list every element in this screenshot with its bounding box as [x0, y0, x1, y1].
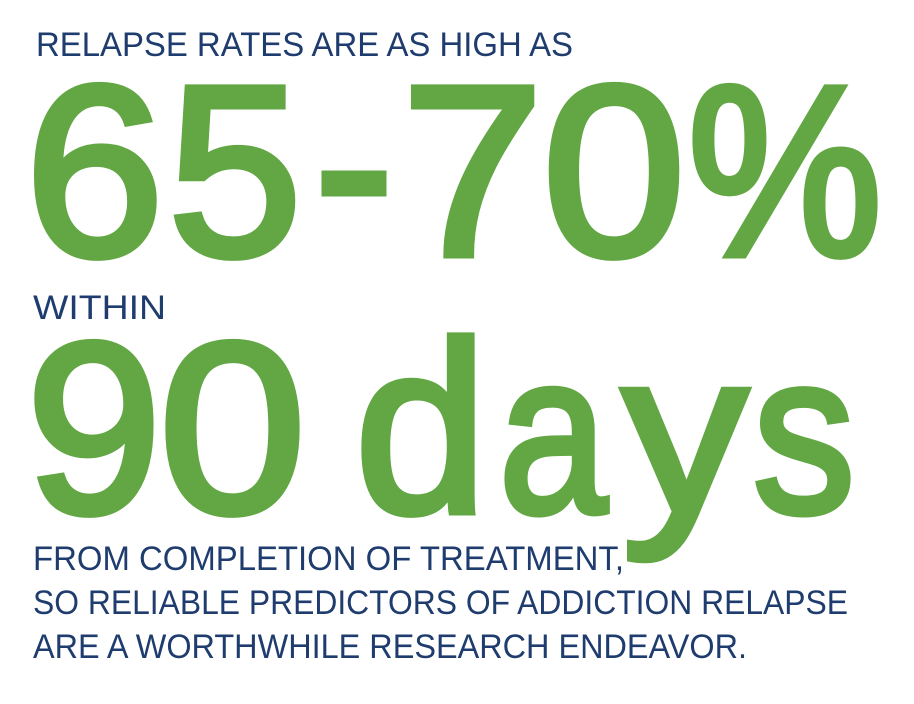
big stat: 90 days	[26, 292, 855, 564]
closing text block: ARE A WORTHWHILE RESEARCH ENDEAVOR.	[33, 628, 747, 666]
closing text block: FROM COMPLETION OF TREATMENT,	[33, 540, 624, 578]
big stat: 90 days: 0	[159, 292, 306, 564]
big stat: 90 days: a	[499, 305, 607, 560]
big stat: 65-70%: 7	[402, 35, 543, 307]
big stat: 65-70%	[25, 28, 882, 307]
big stat: 65-70%: 5	[168, 36, 302, 307]
closing text block: SO RELIABLE PREDICTORS OF ADDICTION RELAPSE	[33, 584, 848, 622]
big stat: 90 days: 9	[26, 293, 162, 564]
big stat: 65-70%: -	[314, 28, 394, 300]
big stat: 90 days: d	[355, 292, 487, 564]
big stat: 65-70%: 6	[25, 36, 164, 307]
label: within: WITHIN	[33, 289, 166, 327]
big stat: 65-70%: %	[688, 35, 882, 307]
closing text block	[33, 540, 848, 666]
big stat: 65-70%: 0	[542, 36, 686, 307]
heading: relapse rates intro: RELAPSE RATES ARE AS HIGH AS	[36, 26, 573, 64]
big stat: 90 days: s	[753, 305, 855, 561]
big stat: 90 days: y	[622, 304, 748, 562]
